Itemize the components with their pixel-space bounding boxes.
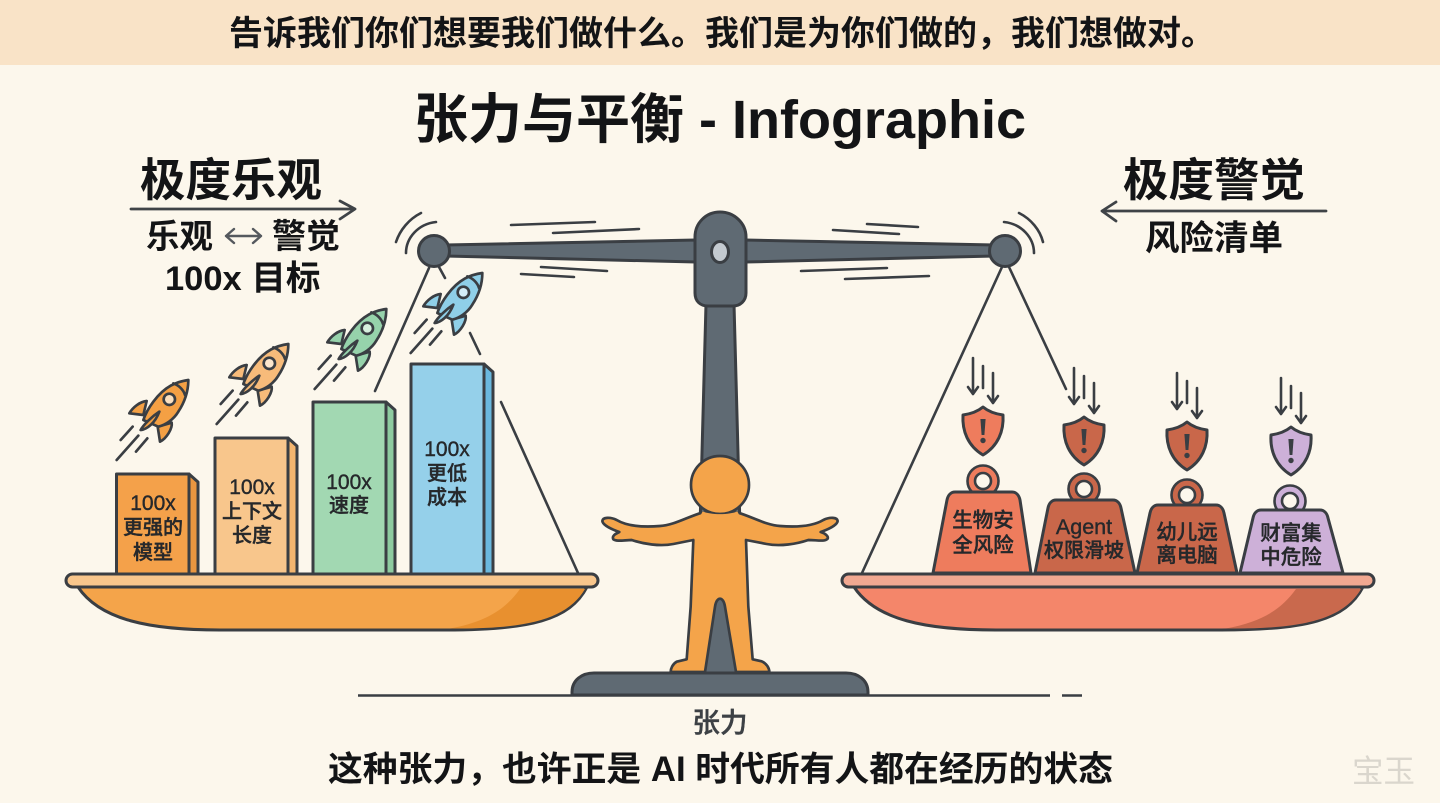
central figure <box>602 456 838 672</box>
shield and arrows 4 <box>1271 378 1311 475</box>
bar: speed: 速度 <box>329 494 369 517</box>
bar: longer context: 上下文 <box>222 500 282 523</box>
left heading: extreme optimism: 100x 目标 <box>165 260 320 298</box>
tension label: 张力 <box>692 707 748 738</box>
left heading: extreme optimism: 警觉 <box>272 218 340 256</box>
weight: agent permission slide <box>1035 474 1135 573</box>
weight: wealth concentration: 财富集 <box>1260 522 1322 545</box>
bar: lower cost: 更低 <box>427 462 467 485</box>
right heading: extreme vigilance <box>1102 155 1326 258</box>
weight: kids away from computers: 幼儿远 <box>1156 521 1218 544</box>
weight: biosecurity risk: 生物安 <box>952 509 1014 532</box>
weight: agent permission slide: 权限滑坡 <box>1044 539 1124 562</box>
left heading: extreme optimism <box>131 155 355 298</box>
rocket: tan <box>217 344 288 424</box>
weight: wealth concentration: 中危险 <box>1260 546 1322 569</box>
scale post <box>696 304 744 676</box>
bar: stronger model: 模型 <box>133 541 173 564</box>
weight: kids away from computers <box>1137 480 1237 573</box>
bar: longer context <box>215 438 297 574</box>
title: 张力与平衡 - Infographic <box>414 90 1026 150</box>
bar: stronger model: 更强的 <box>123 516 183 539</box>
bar: lower cost: 成本 <box>427 486 467 509</box>
center pivot <box>695 212 746 306</box>
left pan strings <box>375 267 578 573</box>
bar: speed <box>313 402 395 574</box>
bar: speed: 100x <box>326 471 372 494</box>
rocket: blue <box>411 273 482 353</box>
left heading: extreme optimism: 乐观 <box>146 219 213 256</box>
scale base <box>572 673 868 695</box>
shield and arrows 3 <box>1167 373 1207 470</box>
bottom caption: 这种张力，也许正是 AI 时代所有人都在经历的状态 <box>328 750 1113 789</box>
bar: lower cost: 100x <box>424 438 470 461</box>
motion lines <box>396 213 1043 279</box>
watermark: 宝玉 <box>1352 753 1415 789</box>
weight: biosecurity risk <box>933 466 1031 573</box>
left heading: extreme optimism: 极度乐观 <box>140 155 322 206</box>
right heading: extreme vigilance: 风险清单 <box>1145 220 1283 258</box>
right heading: extreme vigilance: 极度警觉 <box>1123 155 1305 206</box>
right pan strings <box>862 267 1066 573</box>
bar: stronger model: 100x <box>130 492 176 515</box>
weight: kids away from computers: 离电脑 <box>1156 544 1218 567</box>
weight: biosecurity risk: 全风险 <box>952 534 1014 557</box>
weight: agent permission slide: Agent <box>1056 515 1112 539</box>
rocket: orange <box>117 380 188 460</box>
rocket: green <box>315 309 386 389</box>
baseline <box>358 694 1082 697</box>
shield and arrows 2 <box>1064 368 1104 465</box>
weight: wealth concentration <box>1240 486 1343 573</box>
bar: longer context: 长度 <box>232 524 272 547</box>
right pan <box>842 574 1374 630</box>
bar: lower cost <box>411 364 493 574</box>
bar: longer context: 100x <box>229 476 275 499</box>
left pan <box>66 574 598 630</box>
top banner: 告诉我们你们想要我们做什么。我们是为你们做的，我们想做对。 <box>229 15 1215 53</box>
top banner <box>0 0 1440 65</box>
scale beam <box>418 212 1020 306</box>
bar: stronger model <box>116 474 198 574</box>
shield and arrows 1 <box>963 358 1003 455</box>
